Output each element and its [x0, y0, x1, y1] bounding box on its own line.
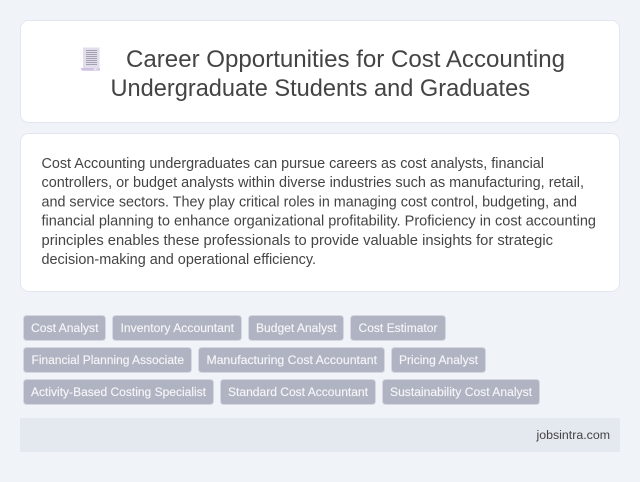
description paragraph: financial planning to enhance organizational profitability. Proficiency in cost accounting	[42, 214, 596, 230]
tag: Pricing Analyst	[392, 348, 486, 372]
tag: Cost Estimator: Cost Estimator	[358, 321, 438, 335]
description paragraph: principles enables these professionals to provide valuable insights for strategic	[42, 233, 553, 249]
tag: Inventory Accountant: Inventory Accountant	[120, 321, 235, 335]
tag: Cost Estimator	[350, 316, 446, 340]
tag: Manufacturing Cost Accountant: Manufacturing Cost Accountant	[206, 353, 378, 367]
description paragraph: and service sectors. They play critical roles in managing cost control, budgeting, and	[42, 194, 577, 210]
tag: Cost Analyst	[24, 316, 106, 340]
tag: Budget Analyst: Budget Analyst	[256, 321, 337, 335]
tag: Sustainability Cost Analyst: Sustainability Cost Analyst	[390, 385, 533, 399]
tag: Inventory Accountant	[112, 316, 242, 340]
title text	[110, 46, 565, 102]
tag: Pricing Analyst: Pricing Analyst	[399, 353, 479, 367]
footer source text: jobsintra.com	[535, 428, 610, 442]
icon: document scroll	[81, 48, 100, 71]
description paragraph: Cost Accounting undergraduates can pursue careers as cost analysts, financial	[42, 156, 544, 172]
description paragraph	[42, 156, 596, 268]
career tags	[24, 316, 540, 404]
tag: Manufacturing Cost Accountant	[198, 348, 384, 372]
tag: Financial Planning Associate	[24, 348, 192, 372]
tag: Standard Cost Accountant: Standard Cost Accountant	[228, 385, 369, 399]
title text: Undergraduate Students and Graduates	[110, 75, 530, 102]
tag: Budget Analyst	[248, 316, 344, 340]
tag: Activity-Based Costing Specialist	[24, 380, 214, 404]
tag: Cost Analyst: Cost Analyst	[31, 321, 99, 335]
title text: Career Opportunities for Cost Accounting	[126, 46, 565, 73]
tag: Sustainability Cost Analyst	[382, 380, 540, 404]
description paragraph: decision-making and operational efficiency.	[42, 252, 316, 268]
panel: title card	[20, 20, 620, 122]
tag: Standard Cost Accountant	[220, 380, 376, 404]
footer bar	[20, 418, 620, 452]
tag: Activity-Based Costing Specialist: Activity-Based Costing Specialist	[31, 385, 207, 399]
panel: description card	[20, 134, 620, 292]
tag: Financial Planning Associate: Financial Planning Associate	[32, 353, 184, 367]
description paragraph: controllers, or budget analysts within diverse industries such as manufacturing, retail,	[42, 175, 584, 191]
